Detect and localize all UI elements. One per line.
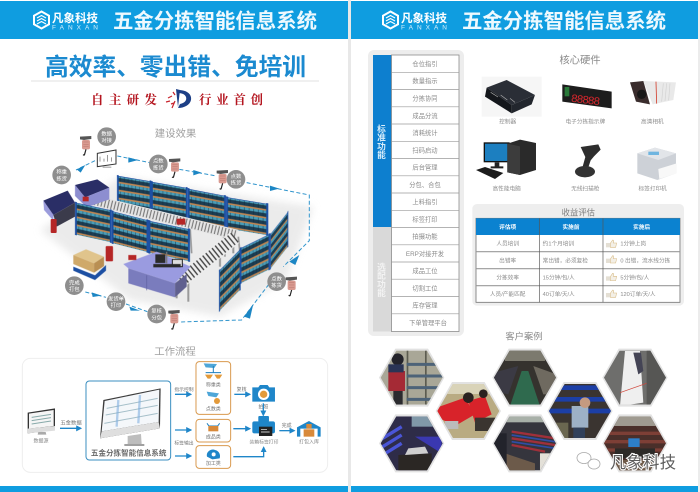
case photo 4 <box>547 381 613 441</box>
red bin <box>106 246 113 261</box>
slogan: 高效率、零出错、免培训 <box>45 54 306 81</box>
label printer <box>637 148 677 193</box>
function list: 拍摄功能 <box>412 232 438 240</box>
step badges: 打印 <box>111 301 121 309</box>
arrow: finish: 完成 <box>282 422 292 429</box>
optional functions tab <box>373 227 392 332</box>
standard functions tab: 功 <box>377 140 386 151</box>
arrow: review <box>234 386 250 394</box>
upper conveyor <box>92 200 240 257</box>
electronic display: 电子分拣指示牌 <box>566 117 605 125</box>
function list: ERP对接开发 <box>406 249 445 258</box>
step badges: 拣货 <box>271 281 283 289</box>
step badges: 拣货 <box>153 163 164 171</box>
optional functions tab: 选 <box>377 261 386 272</box>
orange box: weighing and counting <box>196 362 231 414</box>
case photo 3 <box>492 348 558 408</box>
icon: warehouse: 打包入库 <box>299 438 319 445</box>
arrow: review: 复核 <box>237 386 247 393</box>
orange box: processing <box>196 446 231 468</box>
arrow: five metal data <box>60 418 82 428</box>
table header: 实施前 <box>563 223 580 231</box>
step badges: 分包 <box>151 313 163 321</box>
panel: benefit evaluation <box>472 204 684 306</box>
step badges: 复核 <box>151 307 163 315</box>
back racks <box>117 175 268 236</box>
function list: 切割工位 <box>412 284 438 292</box>
function list: 仓位指引 <box>412 59 438 68</box>
orange box: weighing and counting: 点数类 <box>206 405 221 412</box>
controller <box>482 77 542 125</box>
table header: 评估项 <box>499 223 516 231</box>
icon: camera <box>252 385 275 411</box>
front racks <box>75 202 190 262</box>
standard functions tab: 能 <box>377 149 386 160</box>
high performance PC <box>476 140 536 193</box>
electronic display: 88888 <box>570 94 601 109</box>
step badges: 点数 <box>231 172 242 180</box>
function list: 库存管理 <box>412 300 438 310</box>
header title: 五金分拣智能信息系统 <box>113 9 317 33</box>
data source monitor: 数据源 <box>34 437 48 444</box>
wireless scanner: 无线扫描枪 <box>571 185 600 193</box>
watermark: WeChat account: 凡象科技 <box>610 454 676 472</box>
table rows: 出错率 <box>499 256 516 264</box>
logo: Fanxan <box>34 11 98 32</box>
function list: 扫码启动 <box>412 146 438 154</box>
panel: functions <box>368 50 464 336</box>
orange box: finished goods: 成品类 <box>206 433 221 440</box>
function list: 后台管理 <box>412 162 438 172</box>
high performance PC: 高性能电脑 <box>493 185 521 193</box>
data monitor <box>97 150 116 168</box>
function list <box>392 55 459 332</box>
arrows: system outputs: 指示控制 <box>174 386 194 393</box>
packing desk <box>123 252 191 297</box>
scanners <box>80 136 297 329</box>
icon: label printer: 装箱标签打印 <box>249 438 279 445</box>
arrows: system outputs: 标签输出 <box>174 439 194 446</box>
step badges: 数据 <box>101 129 113 137</box>
route arrowheads <box>77 157 299 319</box>
case photo 1 <box>378 348 445 408</box>
logo: Fanxan <box>383 11 448 32</box>
tagline with emblem <box>91 89 263 108</box>
step badges: 打包 <box>69 285 80 293</box>
right racks <box>219 211 288 312</box>
heading: construction effect: 建设效果 <box>155 127 197 140</box>
orange box: processing: 加工类 <box>206 460 221 467</box>
table rows: 约1个月培训 <box>543 240 574 248</box>
step badges <box>52 127 286 323</box>
arrows to printer <box>233 429 264 457</box>
left page header <box>0 1 348 39</box>
table rows: 15分钟/包/人 <box>543 274 575 282</box>
optional functions tab: 能 <box>377 287 386 298</box>
table rows: 人员培训 <box>496 240 519 248</box>
table rows: 1分钟上岗 <box>620 240 646 248</box>
icon: camera: 拍照 <box>258 404 268 411</box>
function list: 下单管理平台 <box>409 318 447 327</box>
emblem <box>166 89 191 108</box>
left page footer bar <box>0 486 348 492</box>
function list: 成品分流 <box>412 111 438 120</box>
panel: core hardware <box>476 54 677 193</box>
table header <box>499 223 650 231</box>
step badges: 点数 <box>271 274 283 282</box>
wireless scanner <box>571 144 601 193</box>
cardboard boxes on pallet <box>73 249 106 280</box>
label printer: 标签打印机 <box>639 185 667 193</box>
icon: warehouse <box>297 421 321 445</box>
logo: Fanxan: FANXAN <box>401 24 447 32</box>
table rows: 40订单/天/人 <box>543 290 575 298</box>
step badges: 对接 <box>101 136 113 144</box>
HD camera: 高清相机 <box>641 117 664 125</box>
standard functions tab <box>373 55 392 227</box>
optional functions tab: 功 <box>377 278 386 289</box>
heading: core hardware: 核心硬件 <box>559 54 601 67</box>
table rows: 120订单/天/人 <box>620 290 656 298</box>
case photo 8 <box>602 413 668 473</box>
function list: 分包、合包 <box>409 180 441 189</box>
slogan underline <box>31 80 319 82</box>
step badges: 拣货 <box>231 179 242 187</box>
roller conveyor <box>177 237 235 302</box>
table rows: 0 出错，流水线分拣 <box>620 256 671 264</box>
arrow: five metal data: 五金数据 <box>60 418 82 426</box>
optional functions tab: 配 <box>377 271 386 281</box>
step badges: 完成 <box>69 278 80 286</box>
workflow frame <box>22 358 328 472</box>
electronic display <box>562 84 612 125</box>
logo: Fanxan: 凡象科技 <box>52 11 98 25</box>
table <box>476 218 680 302</box>
arrow: finish <box>279 422 294 431</box>
controller: 控制器 <box>499 117 516 125</box>
orange box: finished goods <box>196 419 231 442</box>
table rows: 常出错，必须复检 <box>543 256 588 264</box>
customer cases gallery <box>378 330 670 473</box>
workflow diagram <box>22 358 328 472</box>
table rows: 分拣效率 <box>496 274 519 282</box>
table header: 实施后 <box>633 223 650 231</box>
heading: benefit evaluation: 收益评估 <box>562 207 595 217</box>
step badges: 发货单 <box>108 294 125 302</box>
step badges: 拣货 <box>56 174 68 182</box>
right page footer bar <box>351 486 698 492</box>
table rows: 5分钟/包/人 <box>620 274 650 282</box>
heading: customer cases: 客户案例 <box>505 330 543 341</box>
standard functions tab: 标 <box>377 123 386 134</box>
case photo 2 <box>435 381 502 441</box>
case photo 5 <box>602 348 670 408</box>
case photo 7 <box>492 413 558 473</box>
function list: 分拣协同 <box>412 94 438 102</box>
table rows: 人员/产能匹配 <box>490 290 526 298</box>
page gutter <box>348 0 351 492</box>
step badges: 称重 <box>56 168 68 176</box>
warehouse illustration <box>40 127 313 329</box>
logo: Fanxan: FANXAN <box>52 24 98 32</box>
right page header <box>351 1 698 39</box>
heading: workflow: 工作流程 <box>154 345 196 358</box>
blue dashed route <box>76 156 309 322</box>
standard functions tab: 准 <box>377 132 386 143</box>
HD camera <box>630 81 676 125</box>
function list: 成品工位 <box>412 266 438 275</box>
arrow: camera to printer <box>261 403 265 415</box>
icon: label printer <box>249 416 279 445</box>
logo: Fanxan: 凡象科技 <box>401 11 448 25</box>
watermark: WeChat account <box>577 452 676 472</box>
arrows: system outputs <box>174 386 194 456</box>
main system box: 五金分拣智能信息系统 <box>91 448 167 458</box>
function list: 标签打印 <box>412 214 438 224</box>
function list: 消耗统计 <box>412 128 438 137</box>
header title: 五金分拣智能信息系统 <box>462 9 666 33</box>
floor shadow <box>40 177 313 317</box>
main system box <box>86 381 171 460</box>
icon: WeChat <box>577 452 600 469</box>
data source monitor <box>28 408 55 444</box>
case photo 6 <box>378 413 445 473</box>
step badges: 点数 <box>153 157 164 165</box>
orange box: weighing and counting: 称重类 <box>206 382 221 389</box>
function list: 数量指示 <box>412 76 438 85</box>
purple stations <box>43 179 109 233</box>
function list: 上料指引 <box>412 197 438 206</box>
table rows <box>490 240 671 298</box>
tagline right: 行业首创 <box>199 90 263 108</box>
tagline left: 自主研发 <box>91 90 157 108</box>
page right edge <box>698 0 700 492</box>
